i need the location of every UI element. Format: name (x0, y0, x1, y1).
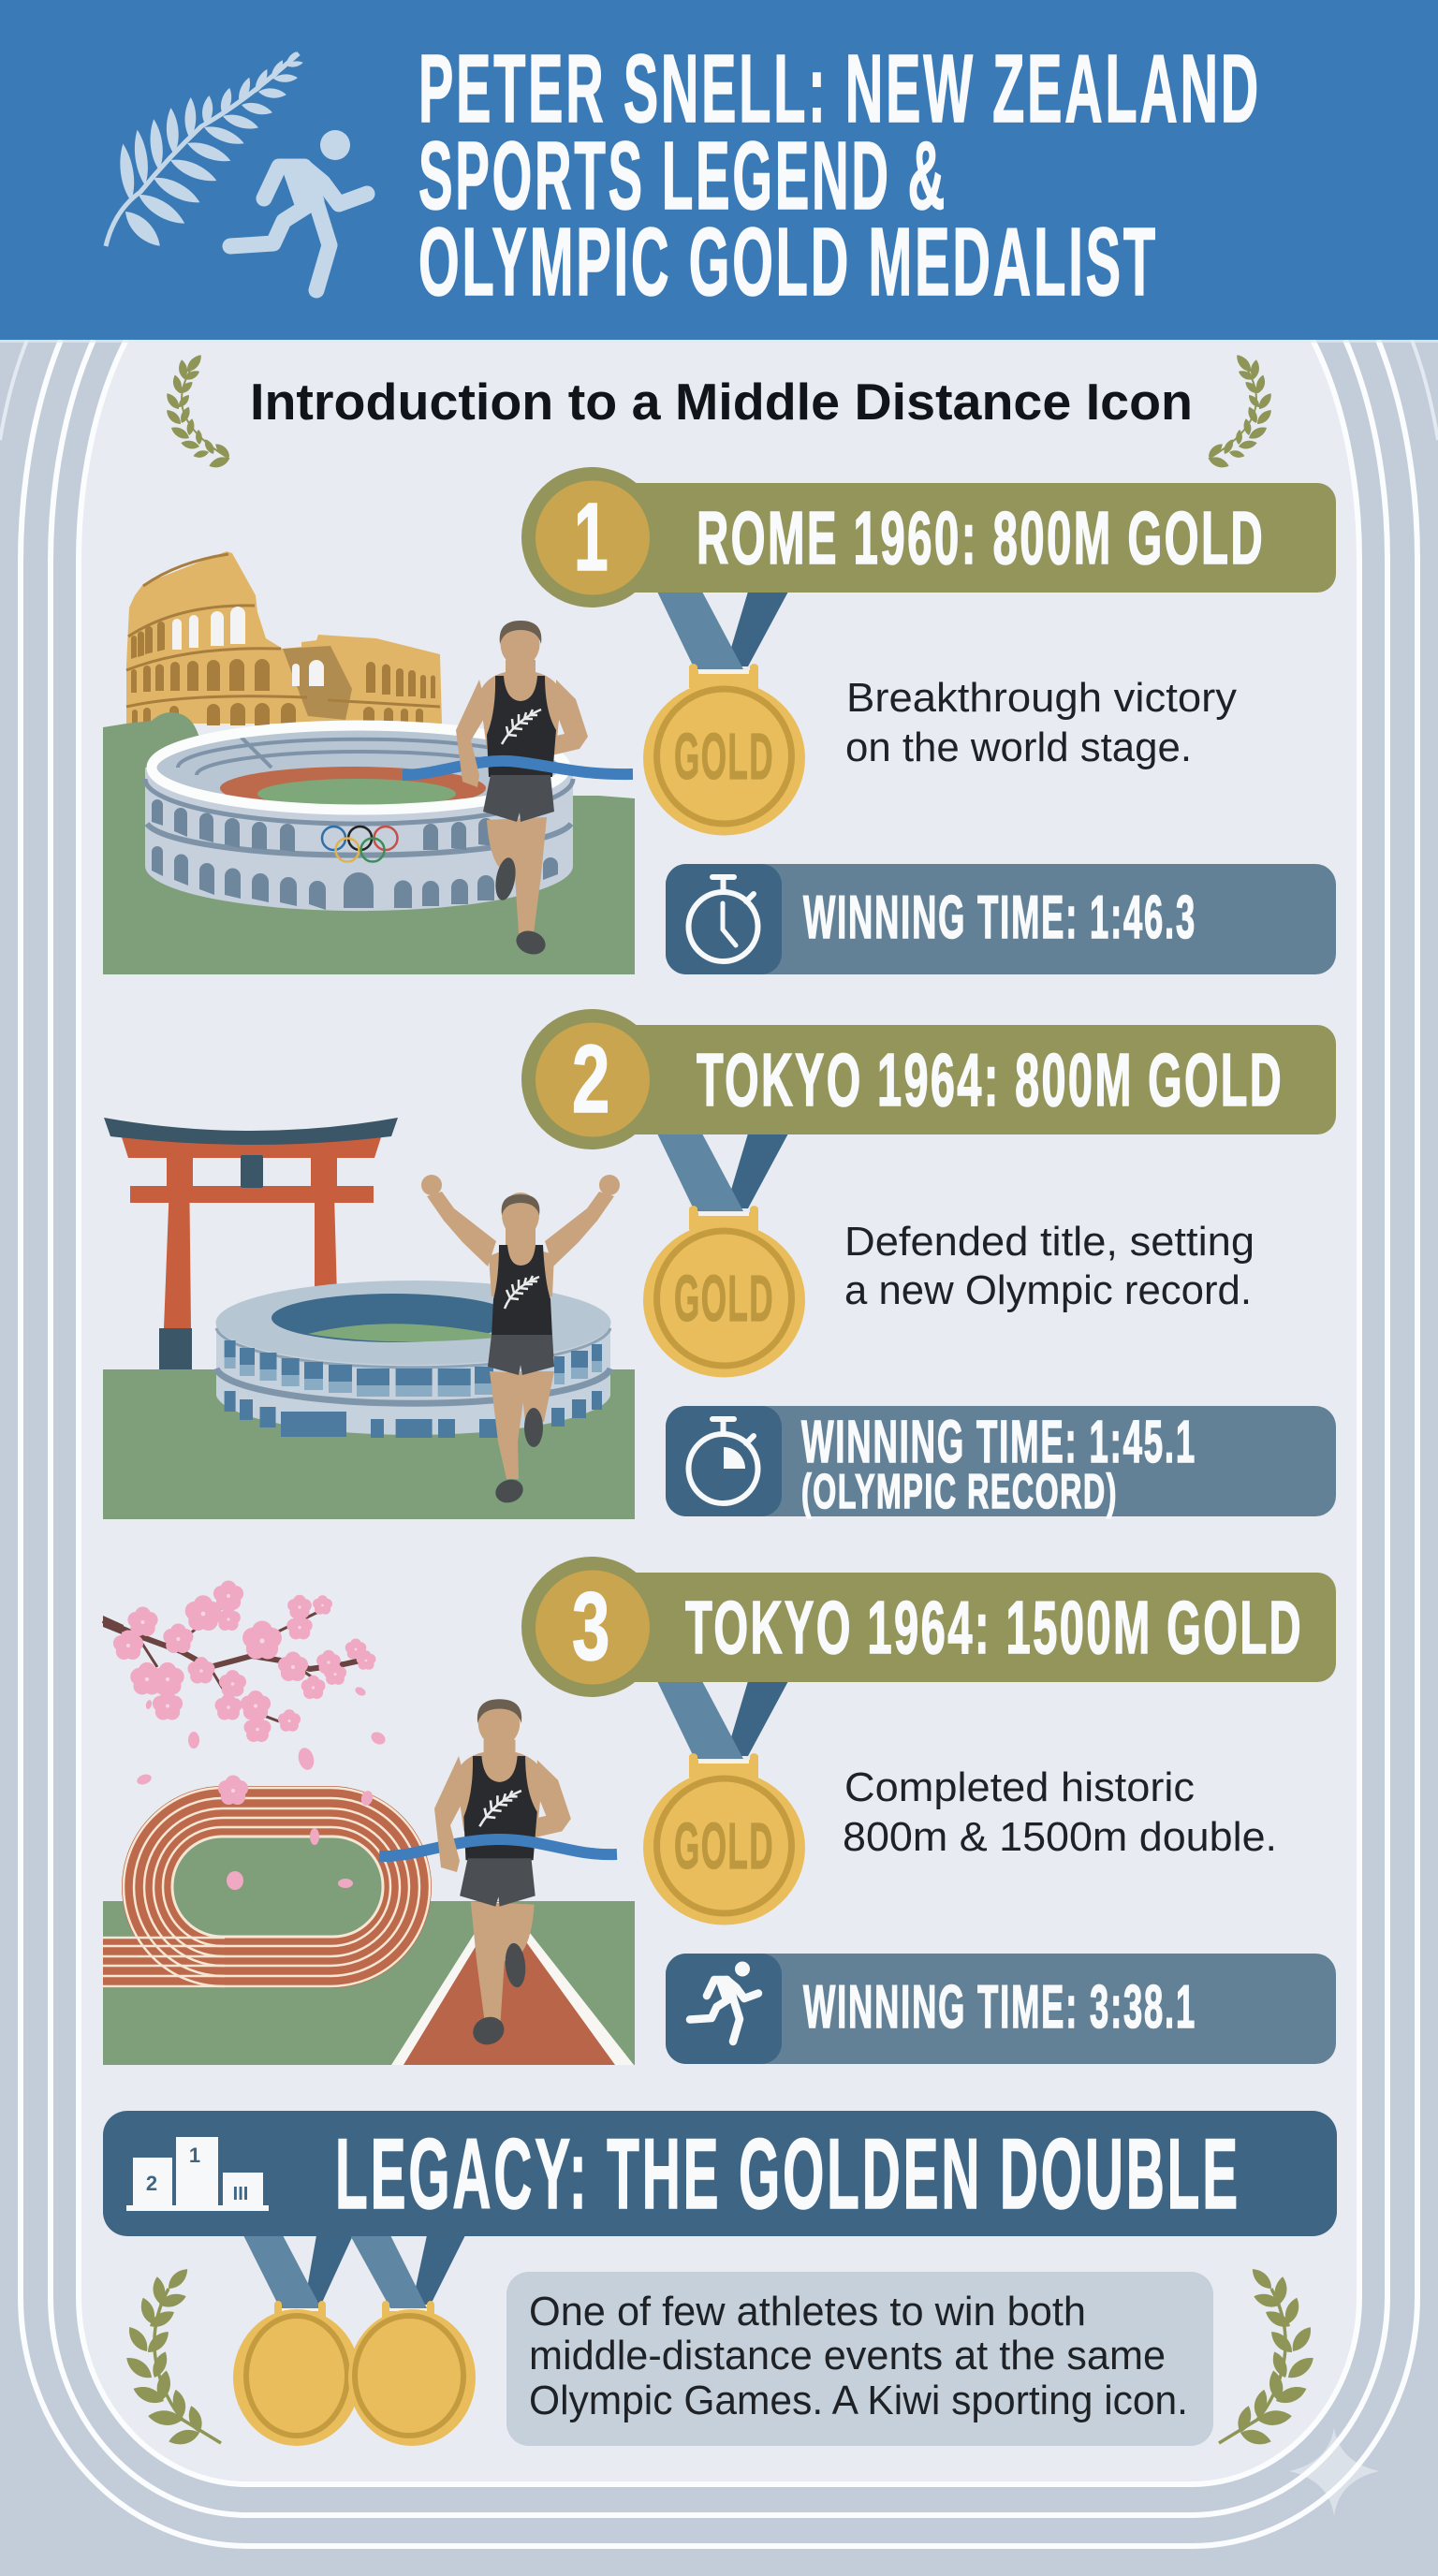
medal: GOLD (674, 720, 774, 793)
icon: stopwatch (689, 877, 758, 961)
winning time bar: (OLYMPIC RECORD) (801, 1465, 1118, 1519)
icon: stopwatch (689, 1419, 758, 1503)
laurel: intro left (164, 352, 232, 470)
illustration: Colosseum (126, 551, 442, 725)
medal (643, 664, 805, 835)
banner: Tokyo 800m: 2 (572, 1025, 613, 1133)
panel: Tokyo 800m details (521, 1009, 1336, 1519)
icon: podium: 2 (146, 2172, 157, 2195)
banner: Tokyo 1500m: 3 (572, 1573, 613, 1680)
panel: Tokyo 1500m details (521, 1557, 1336, 2064)
finish tape (403, 761, 633, 775)
athlete: Tokyo runner arms raised (421, 1175, 620, 1506)
icon: podium (126, 2137, 269, 2211)
header band (0, 0, 1438, 343)
description (843, 1764, 1277, 1860)
icon: Olympic rings (322, 827, 397, 861)
medal: GOLD (674, 1262, 774, 1335)
icon: silver fern on singlet (505, 1276, 539, 1309)
ground (103, 712, 635, 974)
description: 800m & 1500m double. (843, 1814, 1277, 1860)
description: on the world stage. (845, 724, 1192, 770)
medal: first (233, 2301, 360, 2446)
description: a new Olympic record. (844, 1267, 1252, 1313)
illustration: Tokyo stadium (215, 1281, 610, 1438)
description (844, 1219, 1255, 1313)
description: Completed historic (844, 1764, 1195, 1810)
banner: Tokyo 800m (521, 1009, 1336, 1149)
description: Defended title, setting (844, 1219, 1255, 1265)
title: SPORTS LEGEND & (418, 122, 947, 229)
description (845, 675, 1237, 770)
icon: silver fern (106, 51, 303, 252)
athlete: Rome runner (403, 621, 633, 959)
winning time bar (666, 1406, 1336, 1519)
medal ribbons (243, 2235, 465, 2308)
legacy banner (103, 2111, 1337, 2236)
panel: Tokyo 800m illustration (103, 1118, 635, 1519)
medal ribbon (657, 1681, 788, 1759)
athlete arm over tape (434, 1756, 468, 1872)
panel: Rome 1960 illustration (103, 551, 635, 974)
panel: legacy (103, 2111, 1337, 2448)
intro heading: Introduction to a Middle Distance Icon (250, 373, 1193, 431)
medal ribbon (657, 1134, 788, 1211)
central panel (79, 340, 1359, 2484)
panel: Rome 1960 details (521, 467, 1336, 974)
callout: middle-distance events at the same (529, 2333, 1166, 2378)
laurel: legacy right (1219, 2265, 1317, 2448)
finish tape (379, 1839, 617, 1856)
icon: runner (230, 130, 367, 290)
winning time bar (666, 1954, 1336, 2064)
icon: podium: 1 (189, 2144, 200, 2167)
banner: Rome 1960 (521, 467, 1336, 607)
icon: podium: III (233, 2184, 248, 2204)
athlete: Tokyo 1500m runner (456, 1699, 571, 2050)
medal: second (348, 2301, 476, 2446)
banner: Tokyo 1500m (521, 1557, 1336, 1697)
illustration: runway (391, 1902, 634, 2065)
medal ribbon (657, 592, 788, 669)
callout: Olympic Games. A Kiwi sporting icon. (529, 2378, 1188, 2423)
laurel: intro right (1206, 352, 1274, 470)
illustration: torii gate (104, 1118, 398, 1371)
title (418, 35, 1261, 315)
laurel: legacy left (123, 2265, 221, 2448)
illustration: cherry blossom branch (103, 1580, 388, 1890)
illustration: running track (103, 1786, 432, 1988)
description: Breakthrough victory (846, 675, 1237, 721)
winning time bar (666, 864, 1336, 974)
icon: sparkle watermark (1289, 2427, 1379, 2516)
medal: GOLD (674, 1809, 774, 1882)
icon: silver fern on singlet (479, 1791, 521, 1826)
illustration: Rome stadium (145, 725, 573, 911)
ground (103, 1901, 635, 2065)
icon: runner (690, 1962, 758, 2042)
panel: Tokyo 1500m illustration (103, 1580, 635, 2065)
callout (506, 2272, 1213, 2446)
banner: Rome 1960: 1 (574, 483, 611, 591)
icon: silver fern on singlet (502, 710, 541, 744)
ground (103, 1369, 635, 1519)
medal (643, 1206, 805, 1378)
callout: One of few athletes to win both (529, 2289, 1086, 2334)
medal (643, 1753, 805, 1925)
